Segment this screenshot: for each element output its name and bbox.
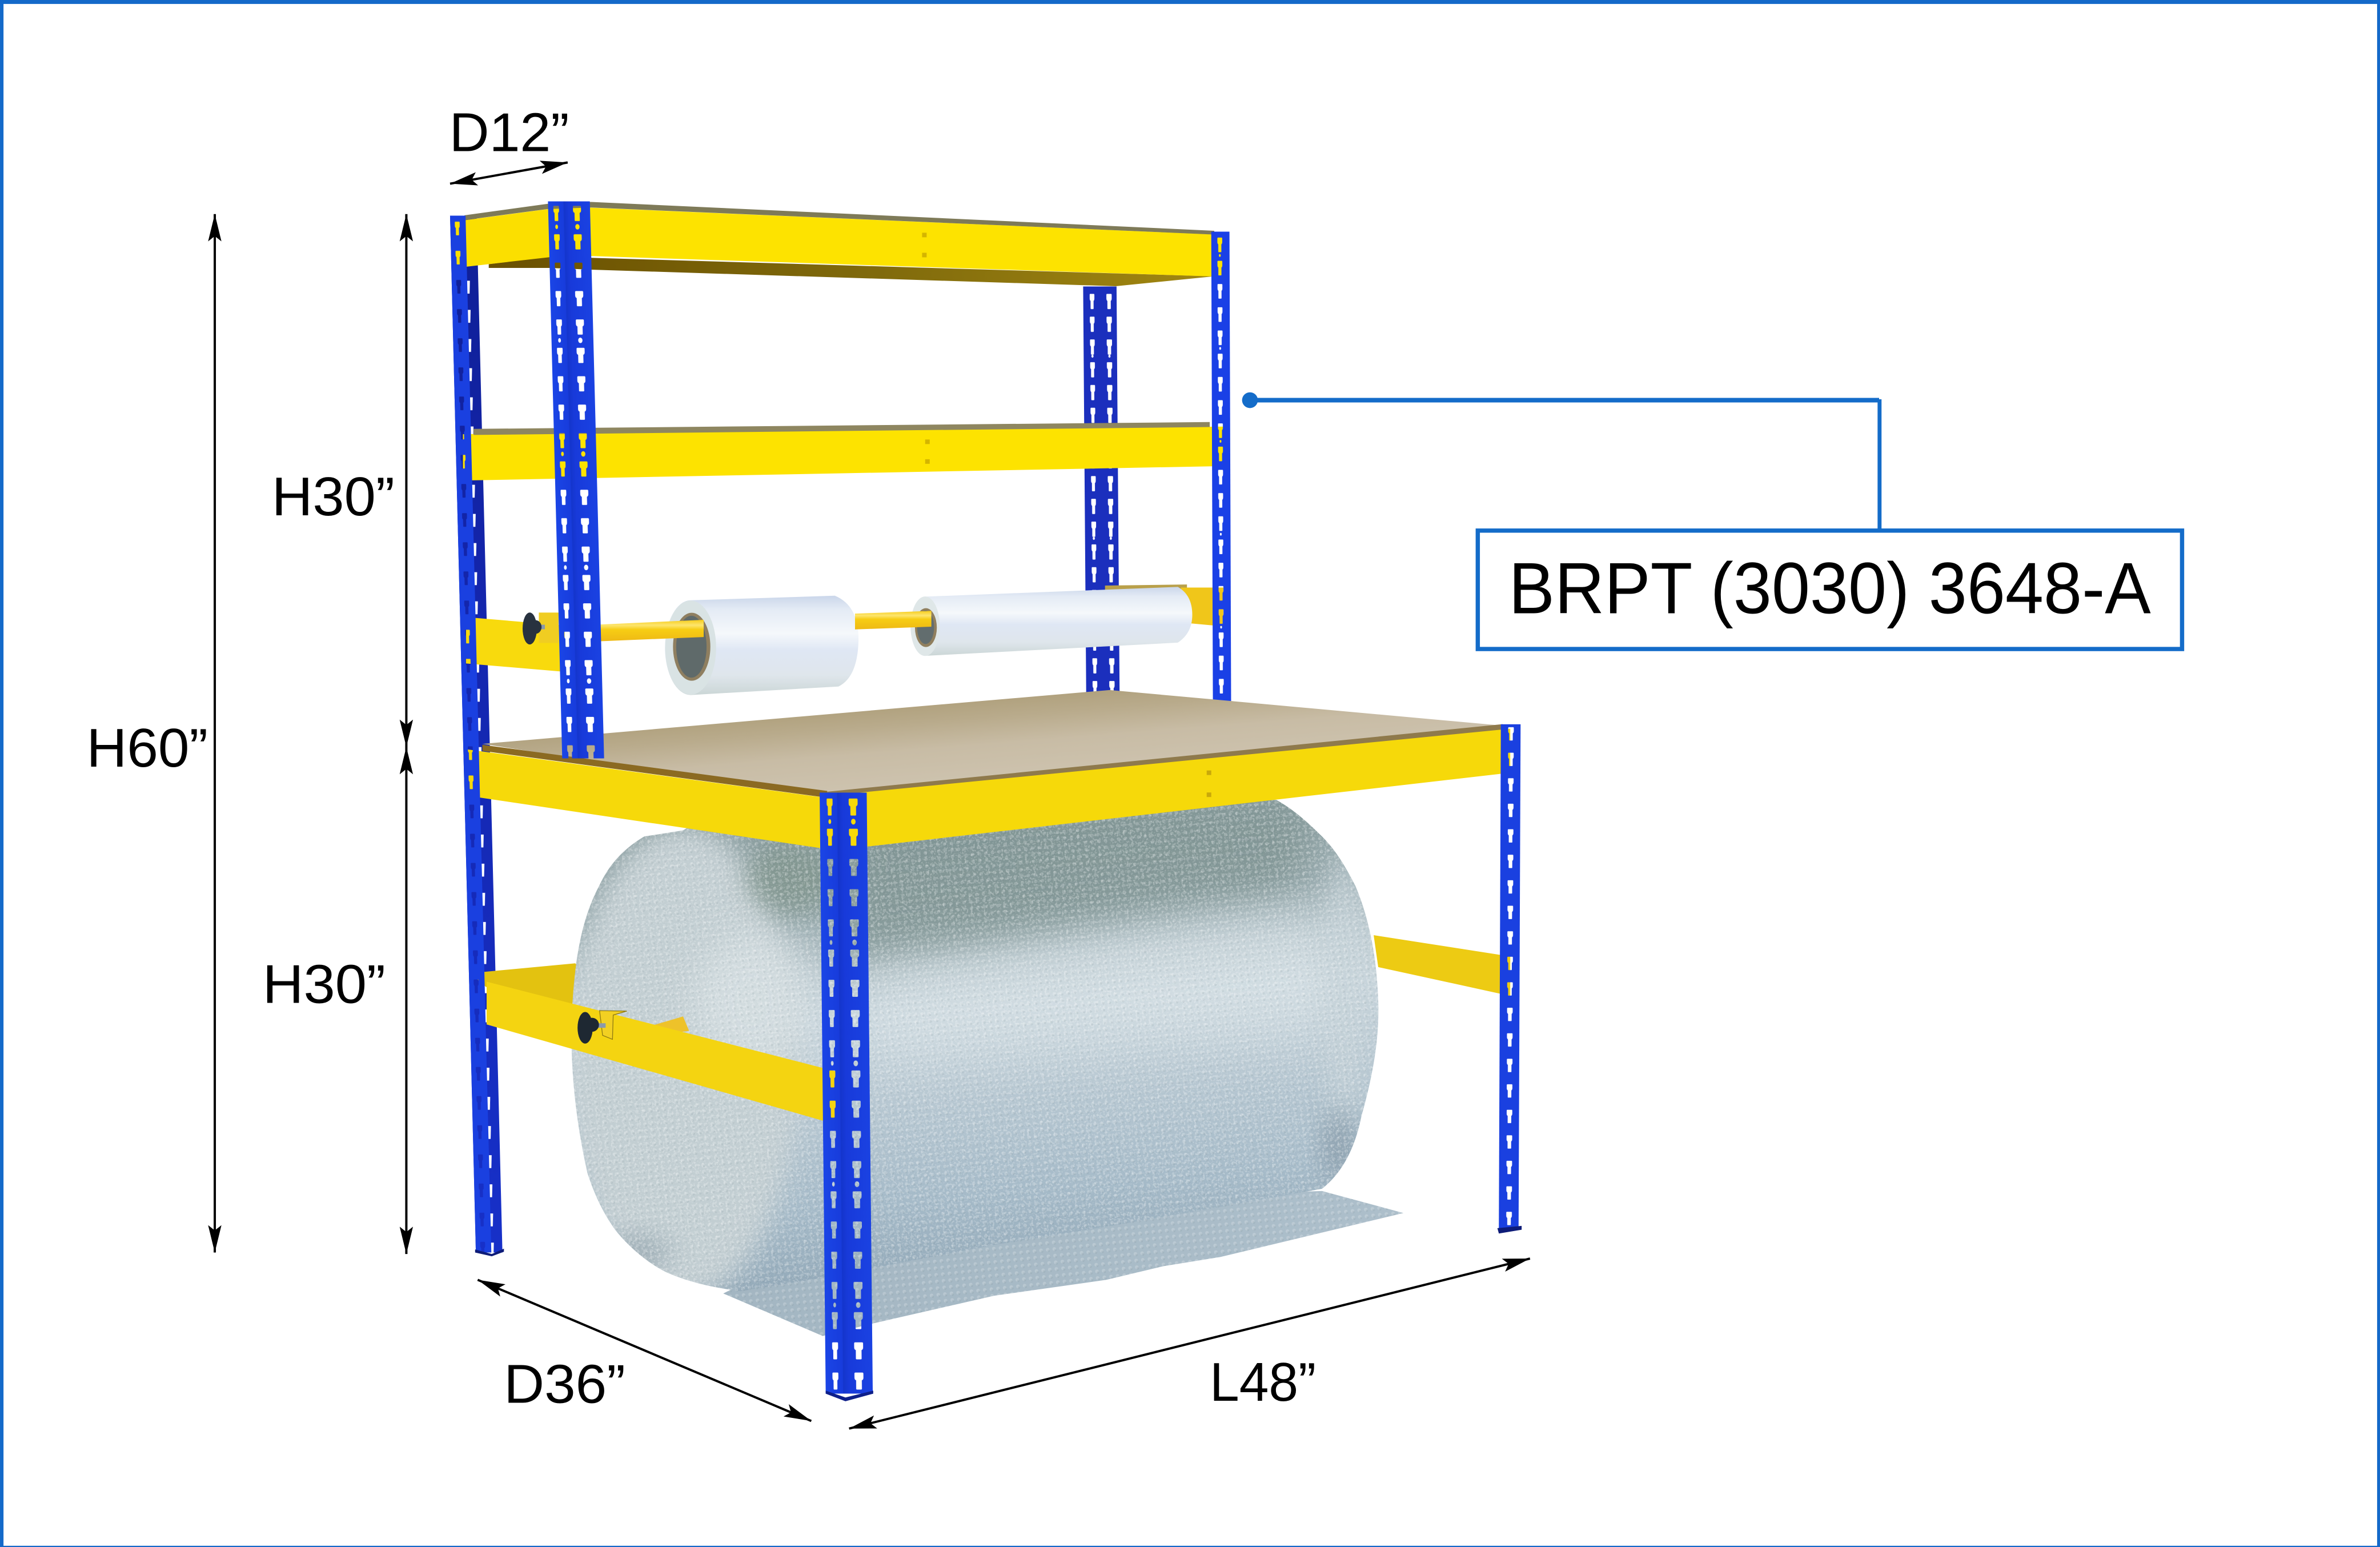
lower arm bracket bbox=[600, 1011, 627, 1039]
top shelf rivets bbox=[922, 233, 926, 257]
top shelf side beam bbox=[454, 204, 584, 268]
rear upright, far left (outer face) bbox=[450, 215, 491, 1252]
film roll, left bbox=[665, 596, 858, 695]
left end bright patch bbox=[696, 938, 806, 1056]
core hollow bbox=[676, 616, 707, 678]
middle shelf rivets bbox=[925, 439, 930, 464]
dimension: top shelf depth bbox=[449, 102, 569, 184]
front beam rivets bbox=[1207, 771, 1211, 797]
core hollow bbox=[917, 611, 934, 644]
roll right rim bbox=[1325, 856, 1362, 1103]
label L48: L48” bbox=[1210, 1352, 1316, 1413]
label H60: H60” bbox=[86, 718, 208, 779]
rear upright of upper tier bbox=[1083, 286, 1119, 693]
dark patch left of post bbox=[747, 841, 838, 914]
label upper H30: H30” bbox=[272, 466, 395, 527]
front post foot bbox=[826, 1390, 873, 1401]
roll end bbox=[910, 596, 940, 656]
dimension: bench depth bbox=[477, 1280, 811, 1421]
rear upright, far left (inner face) bbox=[450, 215, 503, 1252]
work bench board bbox=[483, 690, 1503, 798]
roll holder arm, upper left bbox=[466, 617, 565, 672]
top shelf underside bbox=[489, 257, 1214, 286]
right upper arm bracket bbox=[1105, 584, 1223, 626]
top shelf board edge bbox=[464, 202, 1214, 235]
bright centre band bbox=[907, 928, 1311, 1045]
dimension: bench length bbox=[849, 1259, 1530, 1429]
callout leader line bbox=[1242, 392, 1880, 530]
bubble wrap floor sheet bbox=[723, 1191, 1403, 1336]
label lower H30: H30” bbox=[263, 953, 386, 1015]
lower rear arm bbox=[1374, 935, 1510, 996]
lower arm, front bbox=[487, 981, 838, 1125]
far left post foot bbox=[475, 1249, 504, 1256]
lower arm stem through roll bbox=[649, 1016, 689, 1034]
label D12: D12” bbox=[449, 102, 569, 163]
roller rod bbox=[592, 611, 932, 642]
right lower post bbox=[1499, 724, 1520, 1230]
left end lower shadow bbox=[604, 1235, 671, 1271]
lower knob bbox=[577, 1012, 605, 1044]
label D36: D36” bbox=[504, 1354, 625, 1415]
front left upper post bbox=[548, 201, 604, 759]
dark upper shadow bbox=[842, 797, 1309, 960]
leader dot bbox=[1242, 392, 1258, 408]
cardboard core bbox=[673, 613, 711, 681]
cardboard core bbox=[915, 608, 937, 647]
roll end bbox=[665, 600, 716, 695]
board edge left bbox=[483, 745, 827, 798]
board edge right bbox=[827, 724, 1503, 798]
film roll, right bbox=[910, 587, 1192, 656]
middle shelf beam bbox=[463, 427, 1223, 480]
model code: BRPT (3030) 3648-A bbox=[1509, 548, 2151, 630]
right post foot bbox=[1498, 1226, 1522, 1233]
lower arm inner ledge bbox=[471, 963, 592, 1009]
front right post bbox=[820, 792, 873, 1394]
callout box bbox=[1478, 531, 2182, 649]
middle shelf bbox=[463, 422, 1223, 480]
top shelf bbox=[454, 202, 1223, 286]
upper knob bbox=[523, 612, 545, 644]
middle shelf board edge bbox=[473, 422, 1210, 435]
upper roll bracket bbox=[539, 612, 559, 643]
bubble wrap roll bbox=[571, 800, 1379, 1291]
right upper post bbox=[1211, 231, 1231, 702]
roll left end bbox=[568, 827, 798, 1298]
work bench left side beam bbox=[466, 749, 865, 855]
top shelf front beam bbox=[548, 206, 1223, 276]
roll lower right shadow bbox=[1322, 1110, 1355, 1183]
work bench front beam bbox=[822, 729, 1510, 852]
